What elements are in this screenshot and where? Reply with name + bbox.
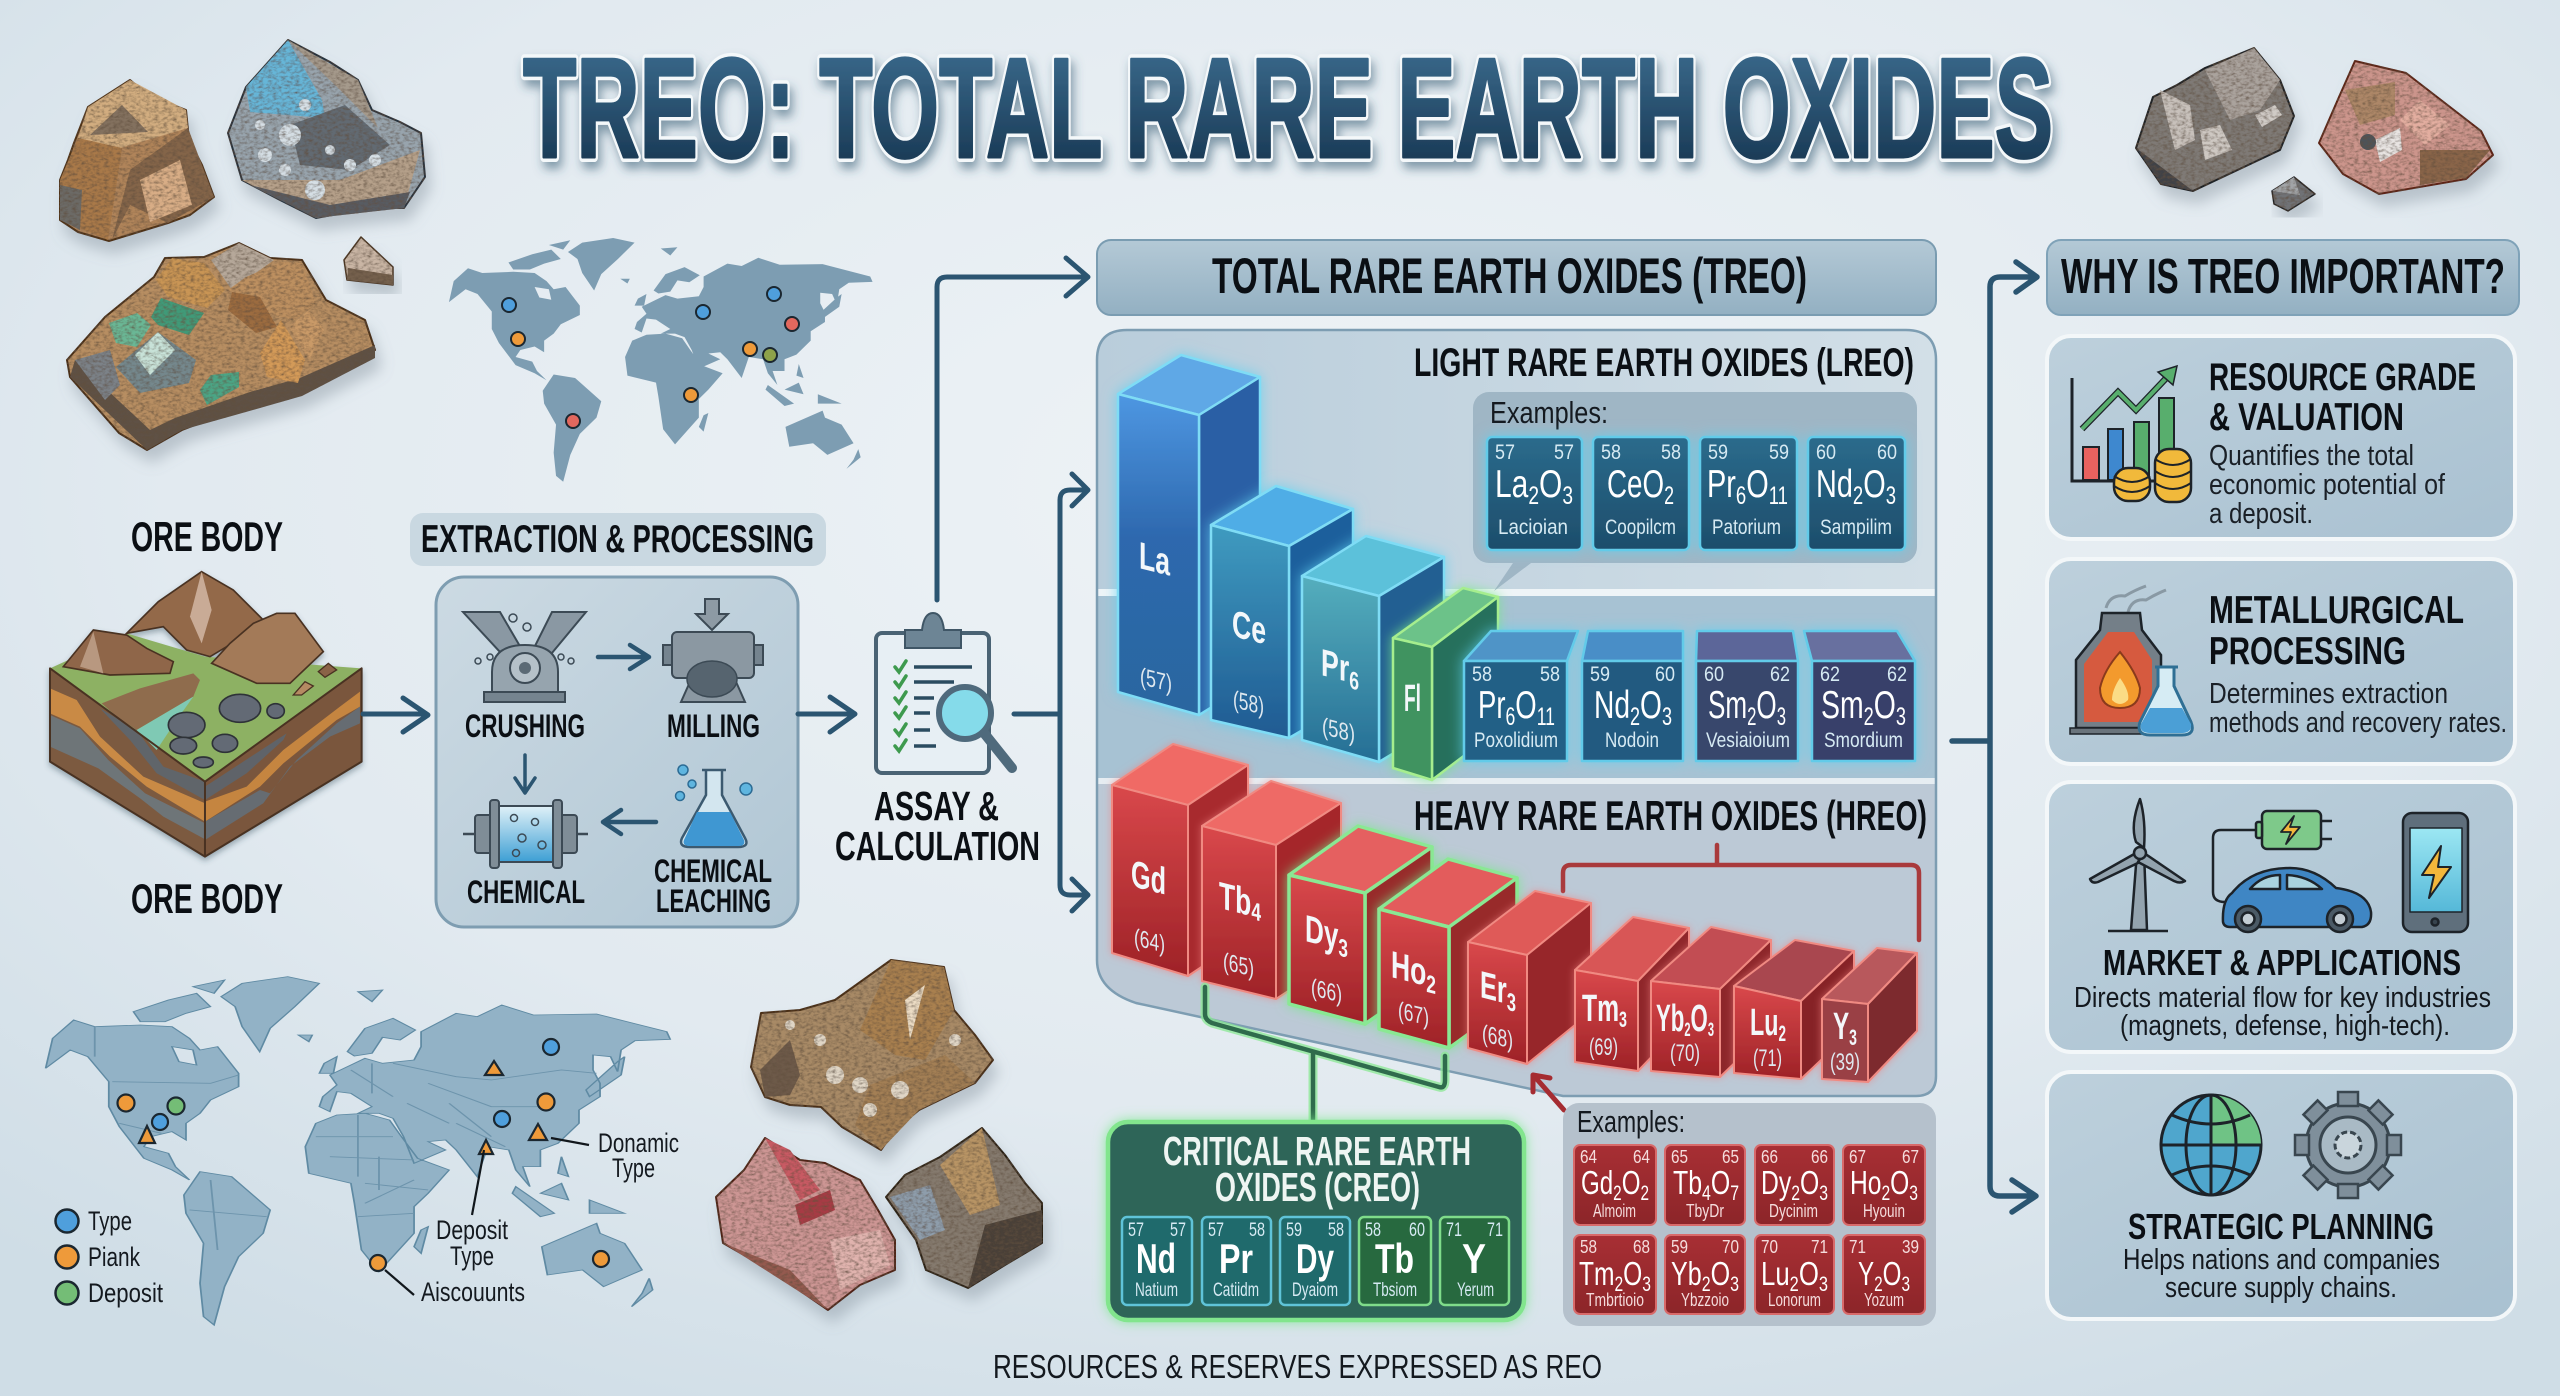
cards: 3D LREO row: 60 <box>1655 663 1675 686</box>
label: ore body bottom: ORE BODY <box>131 875 283 922</box>
panel: HREO examples: 2 <box>1613 1182 1622 1205</box>
panel: critical rare earth oxides: OXIDES (CREO) <box>1215 1164 1420 1210</box>
callout: LREO examples: 2 <box>1528 482 1539 510</box>
heading: extraction and processing <box>410 513 826 566</box>
panel: HREO examples: 3 <box>1642 1273 1651 1296</box>
bar: Lu <box>1734 940 1854 1079</box>
text: resource grade <box>2209 356 2476 530</box>
callout: LREO examples: 59 <box>1708 441 1728 464</box>
panel: HREO examples: Tb <box>1673 1164 1712 1201</box>
bracket: critical oxides connector <box>1205 987 1445 1121</box>
text: market: (magnets, defense, high-tech). <box>2120 1010 2450 1042</box>
panel: HREO examples: Yb <box>1671 1255 1711 1292</box>
bar: Er: (68) <box>1482 1020 1513 1055</box>
callout: LREO examples <box>1473 392 1917 591</box>
label: assay and calculation: ASSAY & <box>874 783 999 829</box>
heading: why is TREO important <box>2047 240 2519 315</box>
bar: Yb: 2 <box>1684 1020 1691 1041</box>
panel: HREO examples: 3 <box>1909 1182 1918 1205</box>
text: strategic planning: STRATEGIC PLANNING <box>2128 1206 2434 1247</box>
cards: 3D LREO row: Sm <box>1821 684 1880 727</box>
text: market <box>2074 942 2491 1042</box>
panel: HREO examples: 2 <box>1640 1182 1649 1205</box>
panel: HREO examples: Almoim <box>1593 1201 1636 1221</box>
callout: LREO examples: 6 <box>1736 482 1746 510</box>
arrow: ore body to processing <box>363 698 428 732</box>
icon: furnace and flask <box>2070 586 2192 735</box>
callout: LREO examples: La <box>1495 463 1538 506</box>
bar: Dy: Dy <box>1305 908 1354 962</box>
bar: Y: Y <box>1833 1006 1858 1048</box>
label: chemical leaching: LEACHING <box>656 883 771 919</box>
icon: bar chart and coins <box>2072 366 2191 502</box>
bar: Tb: Tb <box>1219 875 1265 928</box>
label: Aiscouunts: Aiscouunts <box>421 1277 525 1307</box>
icon: smartphone <box>2403 813 2468 932</box>
cards: 3D LREO row: 6 <box>1505 703 1515 731</box>
panel: HREO examples: O <box>1883 1255 1901 1292</box>
panel: HREO examples: 3 <box>1819 1182 1828 1205</box>
panel: HREO examples <box>1563 1103 1936 1326</box>
rock: red ore bottom <box>716 1138 895 1310</box>
label: chemical leaching <box>654 853 772 919</box>
bar: Y <box>1822 948 1917 1082</box>
map: deposit types <box>46 977 679 1325</box>
label: Deposit Type: Deposit <box>436 1215 508 1245</box>
cards: 3D LREO row <box>1464 631 1915 761</box>
callout: LREO examples: Coopilcm <box>1605 516 1676 539</box>
panel: HREO examples: Lonorum <box>1768 1290 1821 1310</box>
icon: wind turbine <box>2090 799 2185 931</box>
panel: HREO examples: 66 <box>1811 1147 1828 1167</box>
panel: critical rare earth oxides: Dyaiom <box>1292 1280 1338 1301</box>
bar: Er: Er <box>1480 964 1520 1016</box>
panel: HREO examples: 67 <box>1902 1147 1919 1167</box>
panel: HREO examples: 70 <box>1761 1237 1778 1257</box>
panel: HREO examples: 66 <box>1761 1147 1778 1167</box>
rock: grey crystal ore top right <box>2136 48 2294 191</box>
panel: metallurgical processing <box>2047 559 2515 764</box>
cards: 3D LREO row: 3 <box>1777 703 1786 731</box>
panel: HREO examples: O <box>1890 1164 1909 1201</box>
panel: HREO examples: 2 <box>1614 1273 1623 1296</box>
panel: HREO examples: 71 <box>1849 1237 1866 1257</box>
callout: LREO examples: 3 <box>1886 482 1896 510</box>
cards: 3D LREO row: Vesiaioium <box>1706 729 1790 752</box>
bar: Lu: 2 <box>1778 1021 1786 1046</box>
bar: Ce: (58) <box>1233 686 1264 721</box>
panel: critical rare earth oxides: Y <box>1462 1235 1486 1282</box>
bar: Ho: Ho <box>1391 944 1442 998</box>
bar: Ce: Ce <box>1232 603 1266 653</box>
heading: extraction and processing: EXTRACTION & PROCESSING <box>421 518 814 561</box>
text: metallurgical: METALLURGICAL <box>2209 589 2464 632</box>
icon: gear <box>2295 1092 2401 1198</box>
callout: LREO examples: O <box>1863 463 1886 506</box>
bar: Ho: 2 <box>1426 970 1436 1000</box>
bar: Yb: Yb <box>1656 998 1705 1040</box>
pins <box>118 1039 609 1271</box>
arrow: assay up to TREO header <box>937 258 1088 600</box>
panel: HREO examples: 71 <box>1811 1237 1828 1257</box>
panel: extraction steps <box>436 577 798 927</box>
panel: HREO examples: Lu <box>1761 1255 1798 1292</box>
panel: oxides composition <box>1097 330 1936 1096</box>
bar: Er <box>1468 891 1591 1064</box>
legend: Type <box>88 1206 132 1236</box>
panel: HREO examples: Gd <box>1581 1164 1625 1201</box>
icon: mill <box>663 599 763 702</box>
panel: critical rare earth oxides: 57 <box>1128 1220 1144 1241</box>
cards: 3D LREO row: 62 <box>1887 663 1907 686</box>
panel: HREO examples: O <box>1623 1255 1642 1292</box>
panel: critical rare earth oxides: 60 <box>1409 1220 1425 1241</box>
panel: critical rare earth oxides: CRITICAL RARE EARTH <box>1163 1128 1471 1174</box>
bar: Er: 3 <box>1507 988 1516 1018</box>
panel: HREO examples: O <box>1799 1255 1819 1292</box>
panel: critical rare earth oxides: 58 <box>1365 1220 1381 1241</box>
rock: pink ore top right <box>2319 61 2493 194</box>
callout: LREO examples: 2 <box>1853 482 1863 510</box>
bar: Dy: (66) <box>1311 974 1342 1009</box>
heading: heavy rare earth oxides: HEAVY RARE EARTH OXIDES (HREO) <box>1414 792 1927 839</box>
cards: 3D LREO row: Sm <box>1708 684 1766 727</box>
panel: HREO examples: 2 <box>1881 1182 1890 1205</box>
cards: 3D LREO row: 60 <box>1704 663 1724 686</box>
panel: HREO examples: 70 <box>1722 1237 1739 1257</box>
panel: HREO examples: 64 <box>1580 1147 1597 1167</box>
rock: brown ore top left <box>60 80 214 241</box>
bar: Y: 3 <box>1849 1025 1857 1050</box>
cards: 3D LREO row: 58 <box>1540 663 1560 686</box>
panel: critical rare earth oxides: 57 <box>1170 1220 1186 1241</box>
bar: Tb: (65) <box>1223 948 1254 983</box>
label: assay and calculation: CALCULATION <box>835 823 1040 869</box>
text: resource grade: Quantifies the total <box>2209 440 2414 472</box>
panel: HREO examples: Ybzzoio <box>1681 1290 1729 1310</box>
cards: 3D LREO row: Nd <box>1594 684 1644 727</box>
arrow: crushing to milling <box>598 645 649 669</box>
heading: total rare earth oxides: TOTAL RARE EARTH OXIDES (TREO) <box>1212 248 1807 304</box>
panel: HREO examples: 64 <box>1633 1147 1650 1167</box>
bar: Pr: (58) <box>1322 713 1355 748</box>
callout: LREO examples: O <box>1746 463 1769 506</box>
rock: blue crystal ore <box>228 40 425 218</box>
icon: crusher <box>463 612 586 702</box>
label: chemical leaching: CHEMICAL <box>654 853 772 889</box>
panel: critical rare earth oxides: Yerum <box>1457 1280 1494 1301</box>
bar: Gd: (64) <box>1134 924 1165 959</box>
panel: HREO examples: 3 <box>1901 1273 1910 1296</box>
cards: 3D LREO row: Nodoin <box>1605 729 1659 752</box>
panel: critical rare earth oxides: 71 <box>1487 1220 1503 1241</box>
panel: critical rare earth oxides: Nd <box>1136 1235 1176 1282</box>
label: Donamic Type: Type <box>612 1153 655 1183</box>
cards: 3D LREO row: O <box>1640 684 1662 727</box>
callout: LREO examples: 2 <box>1664 482 1674 510</box>
bar: Pr: 6 <box>1349 666 1359 696</box>
bar: Dy: 3 <box>1338 934 1348 964</box>
callout: LREO examples: Sampilim <box>1820 516 1892 539</box>
callout: LREO examples: 11 <box>1769 482 1788 510</box>
text: metallurgical <box>2209 589 2507 739</box>
panel: HREO examples: 65 <box>1671 1147 1688 1167</box>
label: milling: MILLING <box>667 708 760 744</box>
icon: ore body geological block <box>50 572 362 857</box>
text: resource grade: a deposit. <box>2209 498 2313 530</box>
bar: Lu: Lu <box>1750 1002 1796 1044</box>
bar: Ho <box>1379 859 1517 1048</box>
label: chemical: CHEMICAL <box>467 874 585 910</box>
panel: HREO examples: Tmbrtioio <box>1586 1290 1644 1310</box>
panel: critical rare earth oxides: 58 <box>1249 1220 1265 1241</box>
icon: clipboard with magnifier <box>876 613 1012 773</box>
bar: Tm <box>1575 917 1689 1071</box>
panel: HREO examples: 3 <box>1819 1273 1828 1296</box>
icon: chemical drum <box>463 800 588 868</box>
cards: 3D LREO row: 58 <box>1472 663 1492 686</box>
arrow: leaching to chemical <box>603 810 656 834</box>
heading: light rare earth oxides: LIGHT RARE EARTH OXIDES (LREO) <box>1414 341 1914 385</box>
text: strategic planning: secure supply chains. <box>2165 1272 2397 1304</box>
panel: critical rare earth oxides: Tb <box>1375 1235 1414 1282</box>
panel: HREO examples: O <box>1711 1164 1730 1201</box>
cards: 3D LREO row: 59 <box>1590 663 1610 686</box>
callout: LREO examples: O <box>1539 463 1562 506</box>
cards: 3D LREO row: Poxolidium <box>1474 729 1558 752</box>
arrow: HREO examples to bars <box>1533 1075 1564 1110</box>
bar: Yb: (70) <box>1670 1040 1700 1067</box>
panel: HREO examples: Examples: <box>1577 1104 1685 1139</box>
panel: HREO examples: Dy <box>1761 1164 1801 1201</box>
bar: green Fl: Fl <box>1404 678 1421 720</box>
cards: 3D LREO row: 2 <box>1864 703 1874 731</box>
cards: 3D LREO row: Pr <box>1478 684 1517 727</box>
bar: Tm: 3 <box>1619 1007 1627 1032</box>
callout: LREO examples: 60 <box>1877 441 1897 464</box>
arrow: crushing to chemical <box>515 755 535 793</box>
panel: HREO examples: O <box>1622 1164 1640 1201</box>
bar: Gd <box>1112 744 1248 976</box>
label: ore body top: ORE BODY <box>131 513 283 560</box>
cards: 3D LREO row: O <box>1756 684 1777 727</box>
cards: 3D LREO row: O <box>1515 684 1537 727</box>
cards: 3D LREO row: O <box>1874 684 1896 727</box>
cards: 3D LREO row: 3 <box>1896 703 1906 731</box>
rock: large brown ore bottom <box>751 960 993 1150</box>
panel: HREO examples: 68 <box>1633 1237 1650 1257</box>
panel: HREO examples: 2 <box>1874 1273 1883 1296</box>
panel: HREO examples: Yozum <box>1864 1290 1904 1310</box>
bar: Ho: (67) <box>1398 997 1429 1032</box>
panel: HREO examples: 2 <box>1790 1273 1799 1296</box>
callout: LREO examples: 59 <box>1769 441 1789 464</box>
bracket: HREO subset <box>1563 845 1919 940</box>
panel: critical rare earth oxides: 59 <box>1286 1220 1302 1241</box>
panel: critical rare earth oxides: Pr <box>1219 1235 1253 1282</box>
label: Donamic Type <box>598 1128 679 1183</box>
callout: LREO examples: 3 <box>1562 482 1573 510</box>
legend <box>56 1206 163 1308</box>
bar: Gd: Gd <box>1131 853 1166 904</box>
callout: LREO examples: CeO <box>1607 463 1687 506</box>
icon: leaching flask <box>676 765 752 847</box>
panel: critical rare earth oxides: 57 <box>1208 1220 1224 1241</box>
icon: globe <box>2161 1095 2261 1195</box>
panel: resource grade and valuation <box>2047 336 2515 539</box>
label: Deposit Type <box>436 1215 508 1271</box>
text: strategic planning: Helps nations and companies <box>2123 1244 2440 1276</box>
bar: Ce <box>1211 486 1353 738</box>
bar: Yb: O <box>1691 998 1708 1040</box>
bar: La: (57) <box>1140 663 1172 698</box>
rock: grey and tan ore bottom <box>886 1128 1042 1288</box>
arrow: assay to light and heavy groups <box>1014 474 1088 911</box>
bar: Pr: Pr <box>1321 642 1361 694</box>
label: assay and calculation <box>835 783 1040 869</box>
panel: HREO examples: O <box>1800 1164 1819 1201</box>
panel: HREO examples: 3 <box>1730 1273 1739 1296</box>
panel: HREO examples: Y <box>1858 1255 1880 1292</box>
bar: Pr <box>1302 536 1444 762</box>
bar: La: La <box>1139 535 1170 585</box>
map borders <box>95 1027 597 1250</box>
rock: small pebble <box>344 237 393 285</box>
label: crushing: CRUSHING <box>465 708 585 744</box>
heading: total rare earth oxides <box>1097 240 1936 315</box>
bar: Dy <box>1289 826 1432 1024</box>
cards: 3D LREO row: 2 <box>1747 703 1756 731</box>
label: Donamic Type: Donamic <box>598 1128 679 1158</box>
callout: LREO examples: Patorium <box>1712 516 1781 539</box>
panel: critical rare earth oxides: Catiidm <box>1213 1280 1259 1301</box>
panel: HREO examples: Dycinim <box>1769 1201 1818 1221</box>
text: market: MARKET & APPLICATIONS <box>2103 942 2461 983</box>
bar: Y: (39) <box>1830 1049 1860 1076</box>
bar: Yb <box>1651 927 1771 1077</box>
cards: 3D LREO row: 2 <box>1630 703 1640 731</box>
callout: LREO examples: 57 <box>1554 441 1574 464</box>
cards: 3D LREO row: 3 <box>1662 703 1672 731</box>
bar: La <box>1118 355 1260 715</box>
panel: critical rare earth oxides: 71 <box>1446 1220 1462 1241</box>
panel: HREO examples: 2 <box>1702 1273 1711 1296</box>
panel: HREO examples: 59 <box>1671 1237 1688 1257</box>
map: world resource locations <box>449 238 873 482</box>
panel: HREO examples: 4 <box>1702 1182 1711 1205</box>
callout: LREO examples: 57 <box>1495 441 1515 464</box>
bar: Yb: 3 <box>1708 1020 1714 1041</box>
text: resource grade: & VALUATION <box>2209 396 2404 439</box>
panel: HREO examples: 67 <box>1849 1147 1866 1167</box>
panel: market and applications <box>2047 782 2515 1052</box>
panel: HREO examples: 58 <box>1580 1237 1597 1257</box>
bar: green Fl <box>1393 588 1498 780</box>
rock: small grey pebble top right <box>2272 177 2315 211</box>
panel: critical rare earth oxides: Tbsiom <box>1373 1280 1417 1301</box>
panel: HREO examples: 65 <box>1722 1147 1739 1167</box>
panel: HREO examples: Tm <box>1579 1255 1627 1292</box>
text: metallurgical: Determines extraction <box>2209 678 2448 710</box>
callout: LREO examples: Nd <box>1816 463 1866 506</box>
bar: Lu: (71) <box>1753 1045 1782 1072</box>
arrow: processing to assay <box>798 697 855 732</box>
panel: HREO examples: 7 <box>1730 1182 1739 1205</box>
panel: strategic planning <box>2047 1072 2515 1319</box>
legend: Piank <box>88 1242 140 1272</box>
rock: large mixed ore with green crystals <box>67 243 375 450</box>
bar: Tm: Tm <box>1582 988 1639 1030</box>
panel: HREO examples: Ho <box>1850 1164 1892 1201</box>
panel: HREO examples: TbyDr <box>1686 1201 1724 1221</box>
callout: LREO examples: 58 <box>1601 441 1621 464</box>
panel: critical rare earth oxides: Dy <box>1296 1235 1334 1282</box>
footer caption: RESOURCES & RESERVES EXPRESSED AS REO <box>993 1348 1602 1385</box>
panel: critical rare earth oxides: Natium <box>1135 1280 1178 1301</box>
callout: LREO examples: 58 <box>1661 441 1681 464</box>
bar: Tm: (69) <box>1589 1034 1618 1061</box>
cards: 3D LREO row: 62 <box>1820 663 1840 686</box>
panel: critical rare earth oxides <box>1108 1122 1524 1320</box>
bar: Tb: 4 <box>1251 897 1261 927</box>
callout: LREO examples: Pr <box>1707 463 1746 506</box>
text: strategic planning <box>2123 1206 2440 1304</box>
text: market: Directs material flow for key industries <box>2074 982 2491 1014</box>
arrow: connector to why important panels <box>1952 262 2037 1212</box>
panel: HREO examples: Hyouin <box>1863 1201 1905 1221</box>
legend: Deposit <box>88 1278 163 1308</box>
panel: HREO examples: 2 <box>1791 1182 1800 1205</box>
panel: HREO examples: O <box>1711 1255 1730 1292</box>
label lines <box>385 1138 589 1295</box>
panel: critical rare earth oxides: 58 <box>1328 1220 1344 1241</box>
text: metallurgical: PROCESSING <box>2209 630 2406 673</box>
callout: LREO examples: Lacioian <box>1498 516 1568 539</box>
callout: LREO examples: 60 <box>1816 441 1836 464</box>
panel: HREO examples: 39 <box>1902 1237 1919 1257</box>
cards: 3D LREO row: 62 <box>1770 663 1790 686</box>
label: Deposit Type: Type <box>450 1241 494 1271</box>
callout: LREO examples: Examples: <box>1490 395 1608 430</box>
bar: Tb <box>1202 781 1341 999</box>
icon: battery and electric car <box>2213 811 2371 932</box>
cards: 3D LREO row: Smordium <box>1824 729 1903 752</box>
text: resource grade: economic potential of <box>2209 469 2446 501</box>
cards: 3D LREO row: 11 <box>1537 703 1555 731</box>
